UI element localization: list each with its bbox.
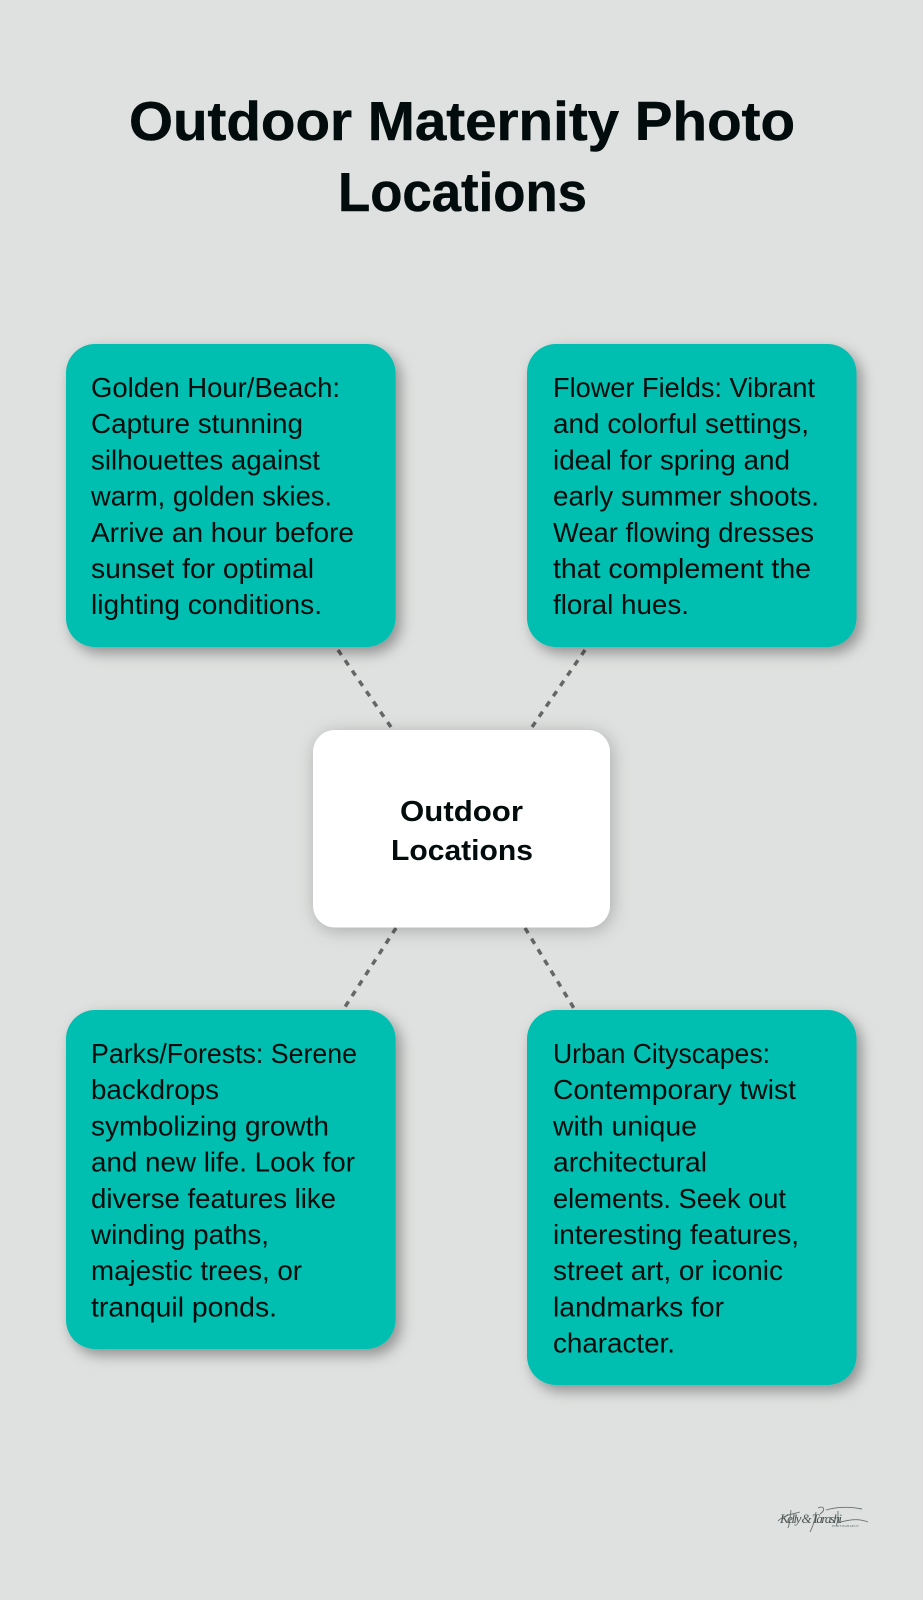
panel: urban cityscapes: interesting features, <box>553 1219 799 1250</box>
panel: parks forests: and new life. Look for <box>91 1147 355 1178</box>
panel: parks forests: tranquil ponds. <box>91 1291 277 1322</box>
panel: center outdoor locations: Outdoor <box>400 796 523 828</box>
panel: urban cityscapes: architectural <box>553 1147 707 1178</box>
panel: flower fields: and colorful settings, <box>553 408 809 439</box>
connector: top-right <box>530 650 585 730</box>
logo: signature <box>778 1507 868 1532</box>
connector: top-left <box>338 650 393 730</box>
panel: center outdoor locations: Locations <box>391 835 533 867</box>
panel: golden hour beach: Capture stunning <box>91 408 303 439</box>
logo: signature: PHOTOGRAPHY <box>832 1524 859 1528</box>
connector: bottom-right <box>525 928 575 1010</box>
panel: parks forests: symbolizing growth <box>91 1110 329 1141</box>
panel: urban cityscapes: elements. Seek out <box>553 1183 786 1214</box>
title: Outdoor Maternity Photo <box>129 90 795 152</box>
title: Locations <box>338 161 587 223</box>
panel: golden hour beach: sunset for optimal <box>91 553 314 584</box>
panel: golden hour beach: warm, golden skies. <box>90 481 332 512</box>
panel: center outdoor locations <box>313 730 610 928</box>
panel: flower fields: floral hues. <box>553 589 689 620</box>
panel: urban cityscapes: landmarks for <box>553 1291 724 1322</box>
panel: flower fields <box>527 344 856 647</box>
logo: signature: Kelly & Tarashi <box>779 1511 842 1526</box>
panel: flower fields: ideal for spring and <box>553 444 790 475</box>
panel: parks forests: majestic trees, or <box>91 1255 302 1286</box>
panel: urban cityscapes: with unique <box>552 1110 697 1141</box>
panel: flower fields: that complement the <box>553 553 811 584</box>
title <box>129 90 795 223</box>
panel: golden hour beach: lighting conditions. <box>91 589 322 620</box>
panel: parks forests <box>66 1010 396 1349</box>
panel: urban cityscapes: character. <box>553 1328 675 1359</box>
panel: urban cityscapes: Urban Cityscapes: <box>553 1038 770 1069</box>
panel: parks forests: diverse features like <box>91 1183 336 1214</box>
panel: parks forests: Parks/Forests: Serene <box>91 1038 357 1069</box>
panel: flower fields: early summer shoots. <box>553 481 819 512</box>
panel: urban cityscapes <box>527 1010 856 1385</box>
panel: golden hour beach: silhouettes against <box>91 444 320 475</box>
connector: bottom-left <box>343 928 396 1010</box>
panel: flower fields: Flower Fields: Vibrant <box>553 372 815 403</box>
panel: urban cityscapes: street art, or iconic <box>553 1255 783 1286</box>
panel: golden hour beach: Golden Hour/Beach: <box>91 372 340 403</box>
panel: urban cityscapes: Contemporary twist <box>553 1074 796 1105</box>
panel: parks forests: winding paths, <box>90 1219 269 1250</box>
panel: golden hour beach <box>66 344 396 647</box>
panel: golden hour beach: Arrive an hour before <box>91 517 354 548</box>
panel: parks forests: backdrops <box>91 1074 219 1105</box>
panel: flower fields: Wear flowing dresses <box>553 517 814 548</box>
